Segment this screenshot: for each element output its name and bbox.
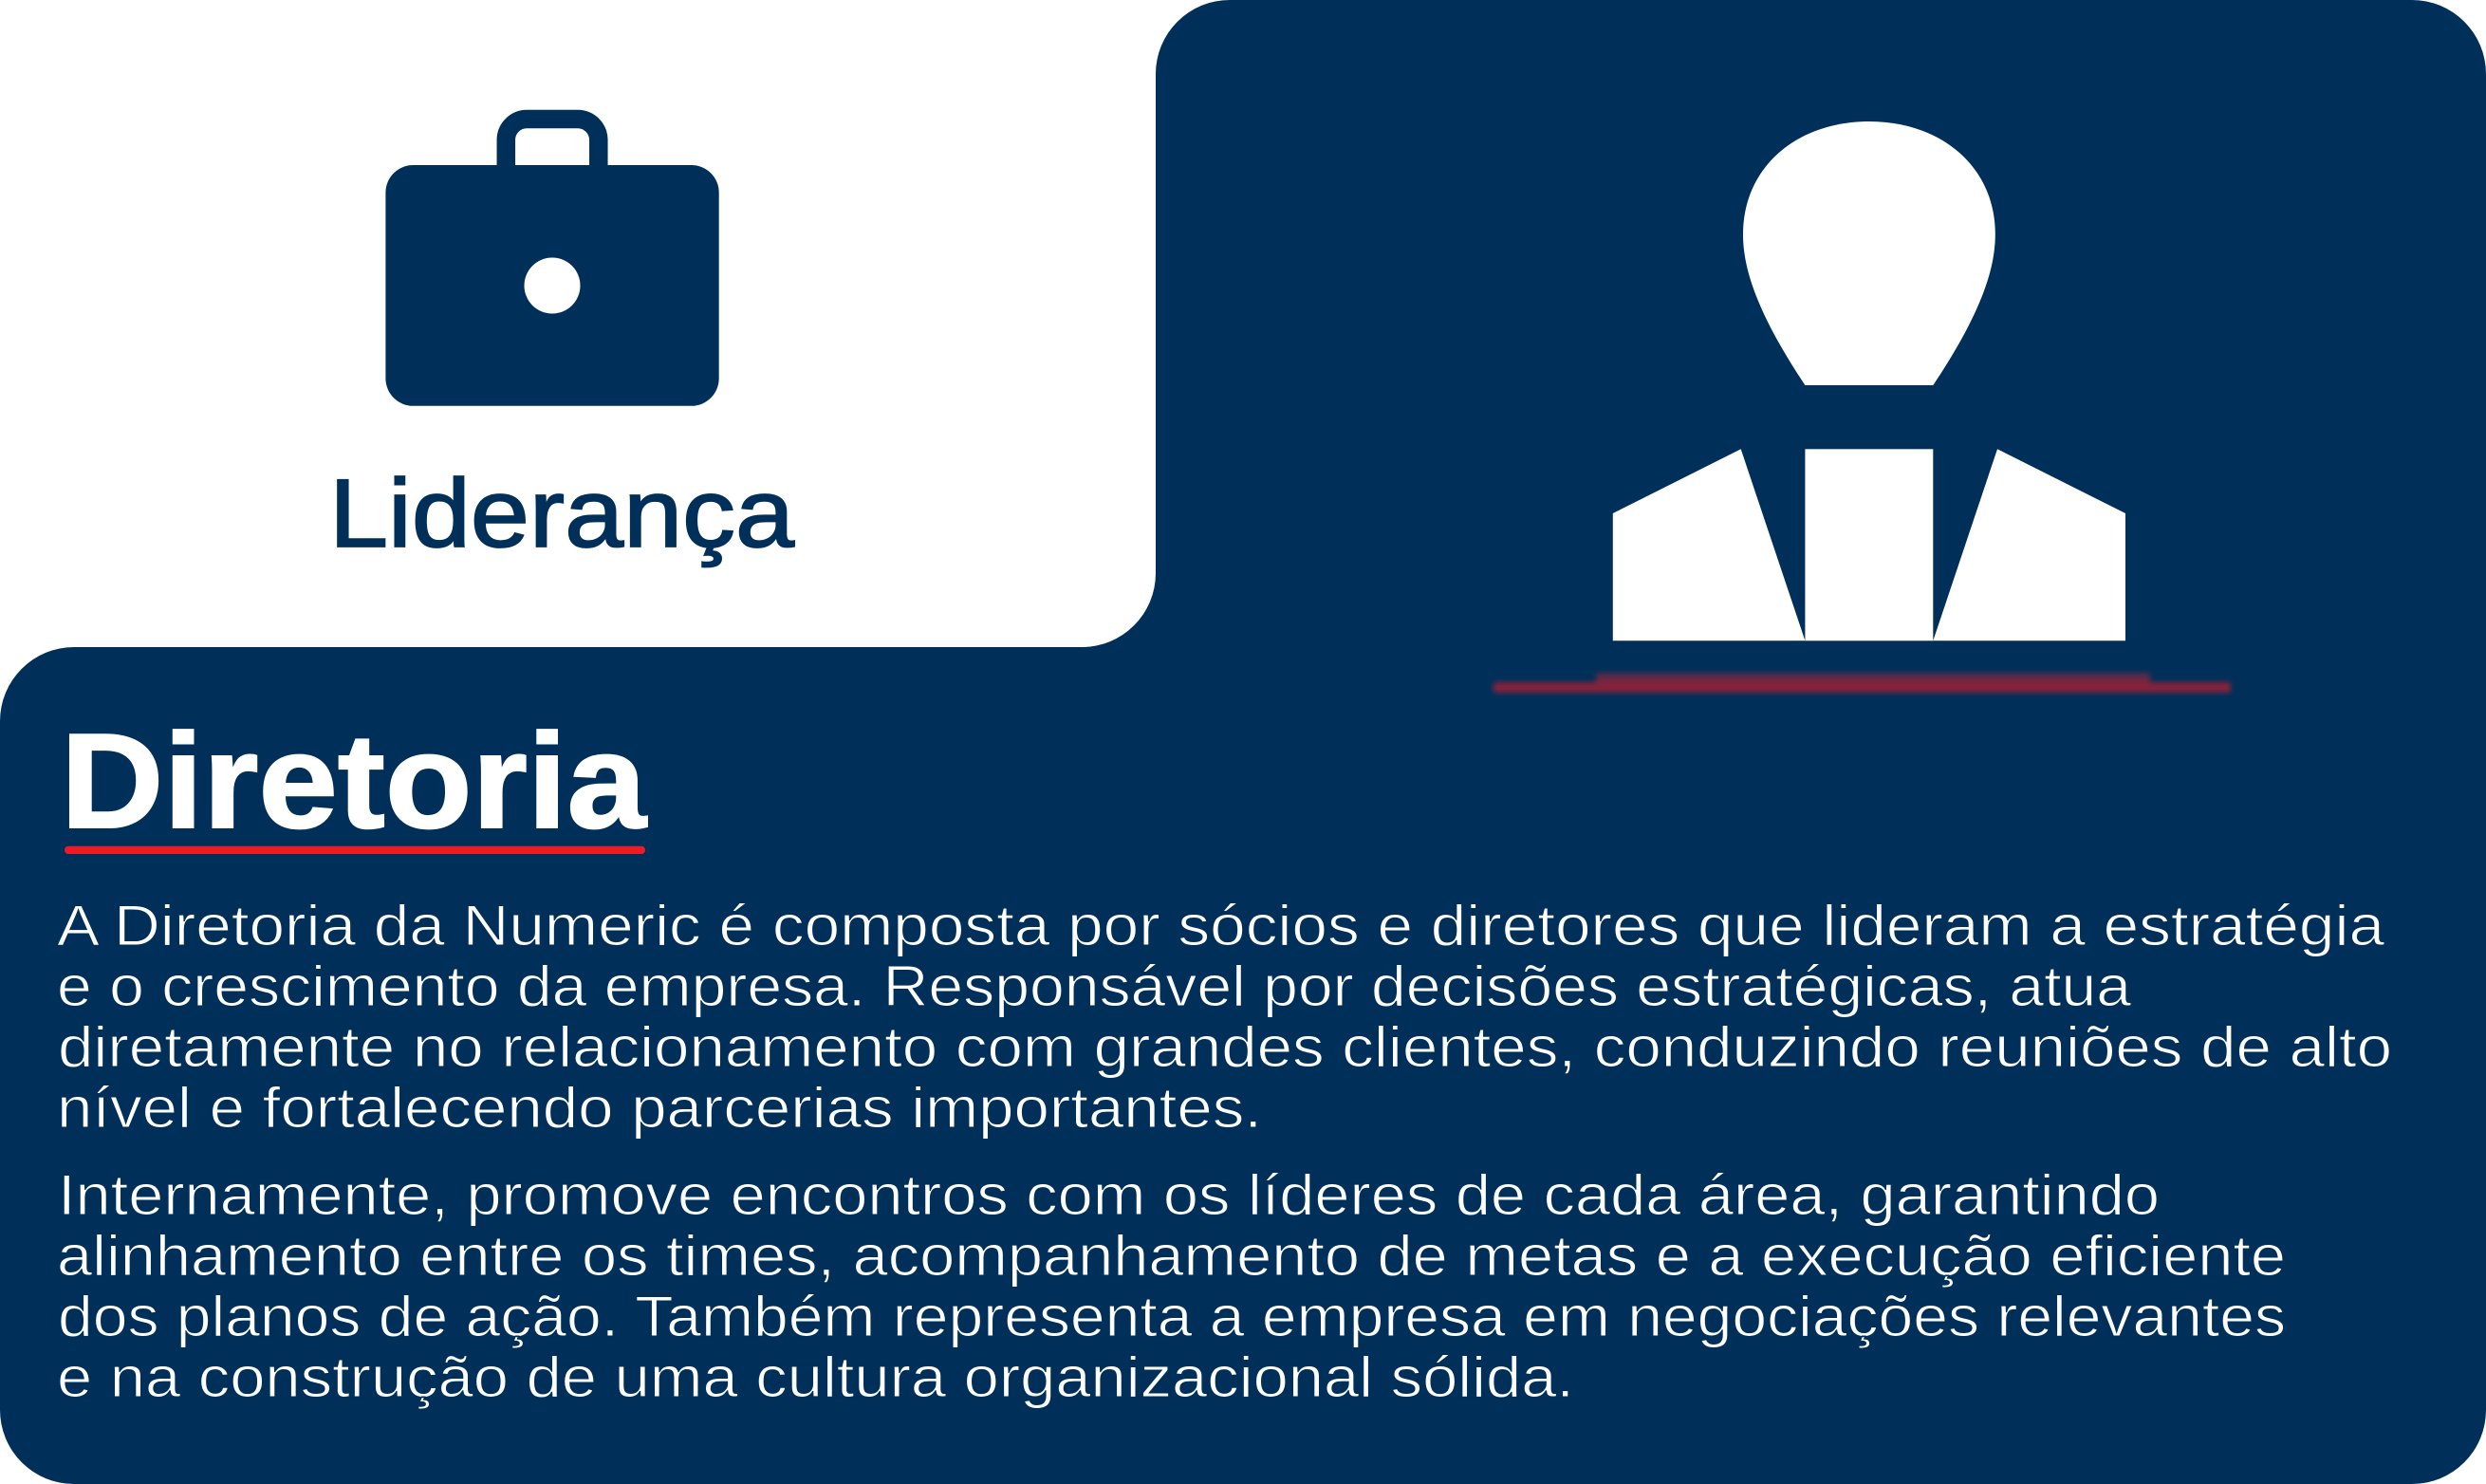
text block: second paragraph: alinhamento entre os times, acompanhamento de metas e a execução eficiente [57, 1224, 2286, 1288]
text block: first paragraph: nível e fortalecendo parcerias importantes. [57, 1076, 1262, 1140]
text block: first paragraph: A Diretoria da Numeric é composta por sócios e diretores que lideram a estratégia [57, 894, 2385, 957]
icon: briefcase [385, 120, 719, 406]
head [1743, 121, 1995, 385]
heading: Liderança: Liderança [329, 459, 794, 567]
red blurred line under person [1493, 673, 2231, 693]
heading: Diretoria: Diretoria [61, 706, 647, 857]
text block: second paragraph: Internamente, promove encontros com os líderes de cada área, garantindo [58, 1163, 2160, 1227]
text block: second paragraph: e na construção de uma cultura organizacional sólida. [57, 1345, 1574, 1409]
text block: first paragraph: e o crescimento da empresa. Responsável por decisões estratégicas, atua [57, 955, 2132, 1018]
text block: first paragraph: diretamente no relacionamento com grandes clientes, conduzindo reuniões de alto [58, 1015, 2392, 1079]
text block: second paragraph [57, 1163, 2286, 1409]
icon: executive person [1613, 121, 2125, 640]
text block: second paragraph: dos planos de ação. Também representa a empresa em negociações relevantes [58, 1285, 2286, 1348]
red underline [65, 846, 645, 854]
shirt front [1805, 449, 1933, 640]
right lapel [1933, 449, 2125, 640]
text block: first paragraph [57, 894, 2392, 1140]
left lapel [1613, 449, 1805, 640]
